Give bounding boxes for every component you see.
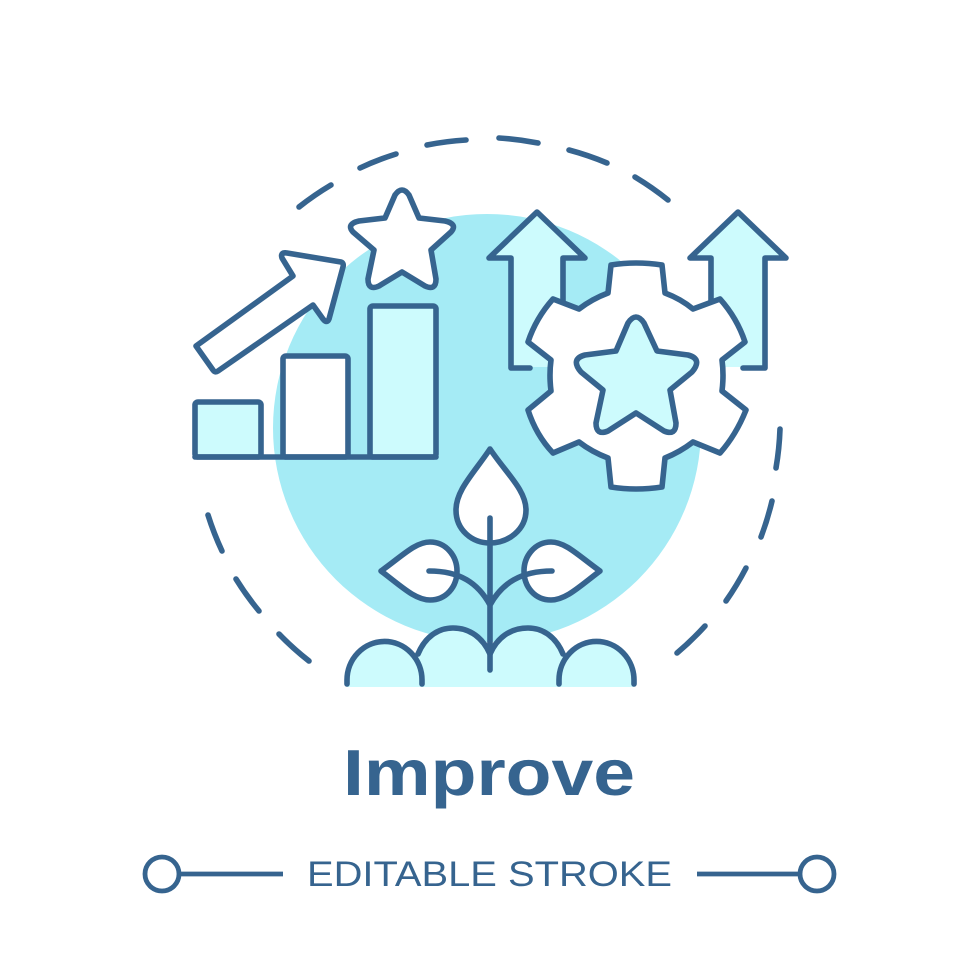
icon: gear with star	[528, 263, 746, 489]
right leaf	[524, 542, 600, 600]
bar: short	[195, 402, 261, 457]
right arrow outline	[690, 212, 786, 368]
hills fill	[347, 628, 634, 687]
bar: tall	[370, 306, 436, 457]
gear star	[576, 317, 697, 432]
footer label: EDITABLE STROKE	[307, 855, 672, 894]
right connector	[697, 857, 834, 891]
icon: rising arrow	[196, 253, 343, 372]
top leaf	[456, 449, 526, 543]
left leaf	[381, 542, 457, 600]
icon: sprout on hills	[347, 449, 634, 687]
chart baseline	[195, 454, 436, 460]
dashed ring	[208, 138, 780, 661]
icon: star above bars	[351, 190, 453, 287]
hills outline	[347, 628, 634, 684]
left connector	[145, 857, 283, 891]
title: Improve	[343, 736, 635, 809]
icon: bar chart with arrow and star	[195, 190, 453, 457]
gear body	[528, 263, 746, 489]
background circle	[273, 214, 701, 642]
right up arrow	[690, 212, 786, 367]
icon: upward arrows behind gear	[489, 212, 786, 368]
stem and branches	[429, 518, 552, 670]
left arrow outline	[489, 212, 585, 368]
footer: editable stroke	[145, 855, 834, 894]
left up arrow	[489, 212, 585, 367]
bar: medium	[283, 356, 348, 457]
